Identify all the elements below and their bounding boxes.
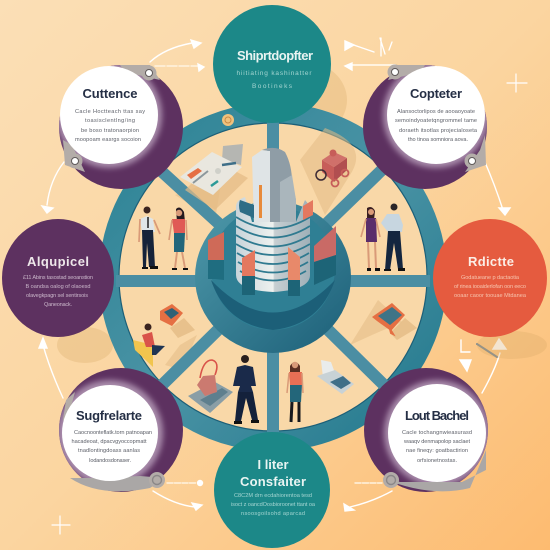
arrow: left lower <box>39 338 63 398</box>
arrow: upper right dashed <box>345 63 395 70</box>
panel: I liter Consfaiter <box>214 432 330 548</box>
body text: Cacle Hoctteach ttas say <box>75 109 145 115</box>
body text: Alansoctorlipos de aooaoyoate <box>397 109 475 115</box>
body text: £11 Abins tasostad seoanstion <box>23 275 93 281</box>
inner ring line <box>119 123 427 431</box>
heading: Lout Bachel <box>405 408 469 423</box>
arrow fragment right <box>460 340 471 371</box>
body text: tnadlontingdoass aanlas <box>78 448 140 454</box>
person: woman left <box>169 208 188 270</box>
panel: Alqupicel <box>2 219 114 337</box>
body text: Bootineks <box>252 83 293 90</box>
central hub platform <box>195 201 351 353</box>
heading line two: Consfaiter <box>240 474 306 489</box>
body text: nsoosgoilsohd aparcad <box>241 511 305 517</box>
box illustration left <box>160 304 195 338</box>
heading: Cuttence <box>82 86 138 101</box>
panel: Sugfrelarte <box>57 368 183 492</box>
body text: isoct z oancdOosbioroonet ttant oa <box>231 502 316 508</box>
body text <box>75 109 145 143</box>
outer ring <box>109 113 437 441</box>
body text: moopoam easrgs socoion <box>75 137 141 143</box>
cart illustration <box>316 150 348 186</box>
body text: semoindyoatetqngrommel tame <box>395 118 477 124</box>
body text <box>23 275 93 308</box>
central tower <box>208 148 336 296</box>
arrow: left side <box>42 162 64 213</box>
arrow: right side <box>484 160 510 215</box>
panel: Copteter <box>363 62 489 189</box>
small buildings <box>208 200 336 296</box>
body text: nae fineqy: goatbactirion <box>406 448 468 454</box>
body text <box>236 70 312 90</box>
heading: Sugfrelarte <box>76 408 142 423</box>
heading: I liter <box>258 457 288 472</box>
panel: Rdictte <box>433 219 547 337</box>
arrow: bottom right <box>344 491 392 511</box>
body text: of rinea iooaiderlofan oon eeco <box>454 284 526 290</box>
person: woman right <box>361 207 380 271</box>
body text: hiitiating kashinatter <box>236 70 312 77</box>
arrow: bottom right dashed <box>355 482 382 484</box>
body text <box>72 430 152 464</box>
person: seated figure <box>133 324 165 367</box>
person: man right <box>381 204 405 271</box>
arrow: bottom left <box>153 491 202 510</box>
body text <box>231 493 316 517</box>
body text: B oandsa oalog of olaoesd <box>26 284 90 290</box>
document and notebook illustration <box>180 144 248 210</box>
body text <box>395 109 478 143</box>
wrench icon <box>477 344 497 357</box>
body text: tho tinoa somniora aova. <box>408 137 468 143</box>
ring marker top <box>222 114 234 126</box>
spokes <box>116 122 430 432</box>
body text: olavegkpagn sel sentirsois <box>26 293 88 299</box>
small plant icon <box>380 38 392 56</box>
body text: ooaar caoor toouae Mtdanea <box>454 293 527 299</box>
body text: Caocnoonteflatk.torn patnoapan <box>74 430 152 436</box>
body text: Godatueane p dactaotia <box>461 275 520 281</box>
body text: C8C2M drn ecdahiorentoa tesd <box>234 493 312 499</box>
tower upper block <box>252 148 296 225</box>
body text: Cacle tochangnwieasurasd <box>402 430 472 436</box>
sparkle plus lower left <box>52 516 70 534</box>
person: man bottom <box>233 355 259 424</box>
sector shadows <box>165 128 402 370</box>
body text <box>454 275 527 299</box>
person: man left <box>139 206 160 269</box>
soft shadows <box>57 62 547 363</box>
body text: hacadeoat, dpacvgyoccopmatt <box>72 439 147 445</box>
body text: be boso tratonaorpion <box>81 128 139 134</box>
body text <box>402 430 472 464</box>
table illustration right <box>372 303 417 340</box>
body text: Qaneonack. <box>44 302 72 308</box>
panel: Cuttence <box>56 62 183 189</box>
laptop illustration bottom right <box>317 360 354 394</box>
sparkle plus upper right <box>507 74 527 92</box>
cylindrical tower base <box>236 197 310 292</box>
arrow: bottom left dashed <box>167 480 202 486</box>
arrow: right lower <box>482 339 506 393</box>
heading: Shiprtdopfter <box>237 48 313 63</box>
body text: orfsionetnostas. <box>417 458 457 464</box>
arrow: upper right <box>345 41 374 52</box>
arrow: upper left curve <box>150 40 201 62</box>
heading: Copteter <box>410 86 462 101</box>
heading: Alqupicel <box>27 254 89 269</box>
body text: toasisclentlng/ing <box>85 118 135 124</box>
heading: Rdictte <box>468 254 514 269</box>
wheel interior <box>118 122 428 432</box>
person: woman bottom <box>287 362 303 422</box>
body text: doraeth itsotlas projecialoseta <box>399 128 478 134</box>
panel: Shiprtdopfter <box>213 5 331 123</box>
body text: Iodandosdonaser. <box>89 458 131 464</box>
arrow: upper left dashed <box>155 64 204 71</box>
machine illustration bottom left <box>188 360 233 413</box>
body text: waaqv denmapolop saclaet <box>403 439 470 445</box>
panel: Lout Bachel <box>364 368 490 492</box>
